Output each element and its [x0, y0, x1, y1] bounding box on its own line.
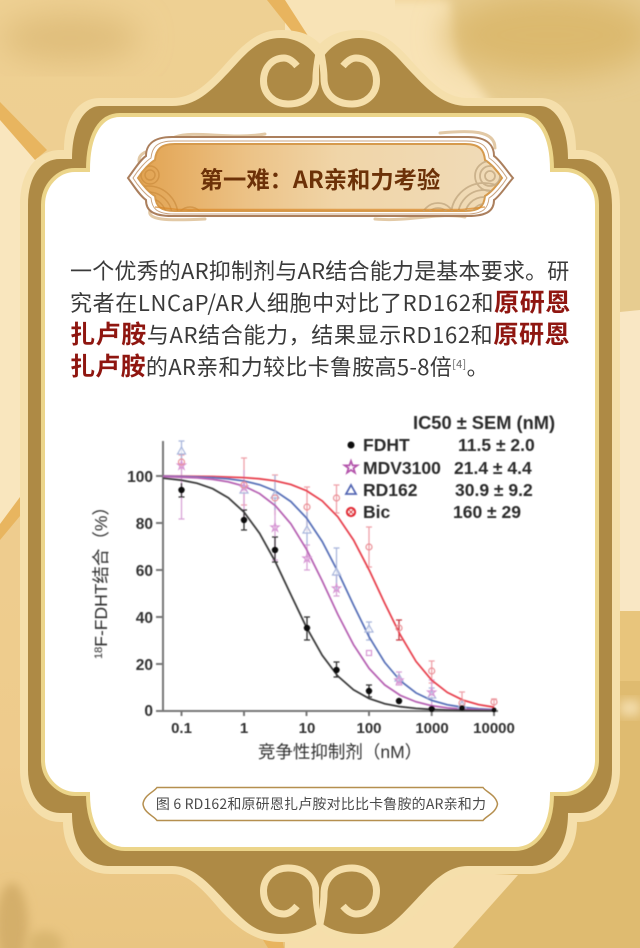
x axis tick labels: 100	[356, 720, 382, 737]
body paragraph	[70, 254, 571, 383]
curve: Bic	[163, 476, 494, 707]
curve: FDHT	[163, 478, 494, 711]
body paragraph: 究者在LNCaP/AR人细胞中对比了RD162和原研恩	[70, 283, 571, 319]
y axis label: F-FDHT结合（%）	[91, 498, 111, 647]
y axis tick labels	[127, 469, 153, 720]
legend: 21.4 ± 4.4	[454, 458, 532, 478]
legend: 160 ± 29	[453, 502, 521, 522]
banner swooshes	[139, 132, 495, 220]
y axis tick labels: 40	[136, 610, 153, 627]
x axis tick labels: 1000	[415, 720, 449, 737]
x axis tick labels: 0.1	[171, 720, 192, 737]
legend: Bic	[363, 502, 390, 522]
data points: MDV3100	[178, 461, 436, 696]
legend: FDHT	[363, 435, 410, 455]
y axis tick labels: 20	[136, 657, 153, 674]
banner cloud swirls	[140, 160, 501, 211]
x axis tick labels: 10	[299, 720, 315, 737]
legend: 11.5 ± 2.0	[458, 435, 535, 455]
x axis tick labels	[171, 720, 515, 737]
x axis tick labels: 10000	[473, 720, 515, 737]
figure caption: 图 6 RD162和原研恩扎卢胺对比比卡鲁胺的AR亲和力	[156, 794, 486, 814]
error bars	[178, 441, 497, 710]
data points: FDHT	[178, 487, 497, 712]
data points: RD162 triangles	[178, 447, 466, 708]
banner title text: 第一难：AR亲和力考验	[200, 161, 440, 195]
legend: RD162	[363, 480, 418, 500]
legend: IC50 ± SEM (nM)	[413, 412, 555, 433]
legend: MDV3100	[363, 458, 441, 478]
y axis tick labels: 100	[127, 469, 153, 486]
body paragraph: 扎卢胺与AR结合能力，结果显示RD162和原研恩	[70, 315, 570, 351]
y axis tick labels: 80	[136, 516, 153, 533]
legend: 30.9 ± 9.2	[455, 480, 533, 500]
x axis tick labels: 1	[240, 720, 248, 737]
x axis label: 竞争性抑制剂（nM）	[258, 742, 422, 762]
curve: RD162	[163, 476, 494, 710]
y axis label: 18	[93, 647, 105, 659]
y axis tick labels: 0	[144, 703, 153, 720]
data points: Bic	[178, 459, 497, 706]
curve: MDV3100	[163, 476, 494, 710]
title banner	[126, 130, 514, 222]
body paragraph: 一个优秀的AR抑制剂与AR结合能力是基本要求。研	[70, 254, 570, 286]
axes	[156, 441, 498, 716]
y axis tick labels: 60	[136, 563, 153, 580]
legend	[345, 412, 555, 522]
body paragraph: 扎卢胺的AR亲和力较比卡鲁胺高5-8倍[4]。	[70, 347, 489, 383]
figure caption	[142, 786, 498, 822]
